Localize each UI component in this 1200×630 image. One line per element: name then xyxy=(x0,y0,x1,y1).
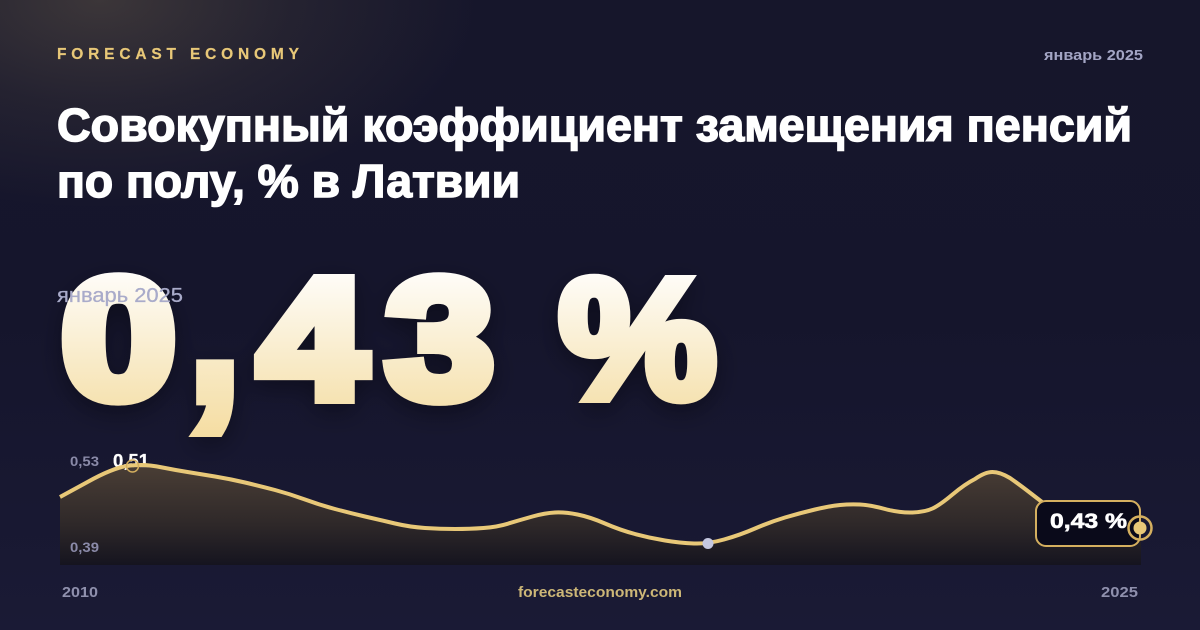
big value: 0 xyxy=(61,243,176,434)
big value: % xyxy=(559,244,716,434)
x axis start: 2010 xyxy=(62,584,98,601)
callout: latest value xyxy=(1036,501,1140,546)
big value: 4 xyxy=(258,244,366,434)
x axis end: 2025 xyxy=(1101,584,1138,601)
source: forecasteconomy.com xyxy=(518,585,682,601)
title: Совокупный коэффициент замещения пенсий xyxy=(57,99,1132,151)
chart xyxy=(60,450,1152,565)
latest marker xyxy=(1128,516,1152,540)
brand label: FORECAST ECONOMY xyxy=(57,46,300,63)
y axis max: 0,53 xyxy=(70,453,99,469)
min marker xyxy=(702,538,714,549)
date over value: январь 2025 xyxy=(57,285,183,307)
y axis min: 0,39 xyxy=(70,539,99,555)
max value label: 0,51 xyxy=(113,450,149,471)
big value: , xyxy=(191,214,239,442)
max marker xyxy=(126,460,138,472)
line xyxy=(60,465,1042,544)
title: по полу, % в Латвии xyxy=(57,155,520,207)
big value xyxy=(61,214,716,442)
big value: 3 xyxy=(386,244,494,434)
title xyxy=(57,99,1132,207)
callout: latest value: 0,43 % xyxy=(1050,510,1127,533)
area fill xyxy=(60,465,1141,565)
date top right: январь 2025 xyxy=(1044,47,1143,64)
